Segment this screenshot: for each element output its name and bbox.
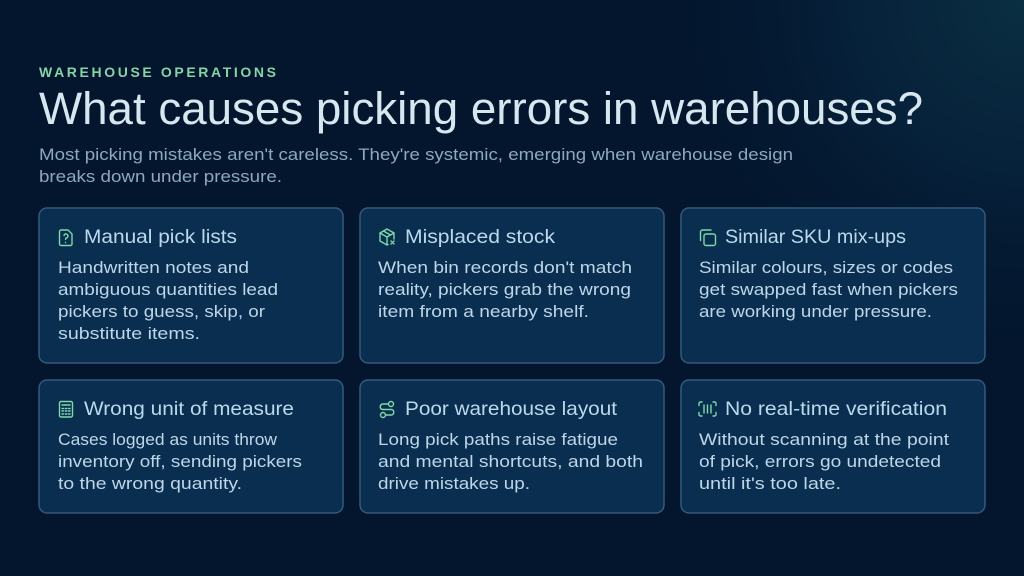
heading: Poor warehouse layout [405, 398, 618, 420]
body text: Similar colours, sizes or codes [699, 259, 953, 277]
body text: item from a nearby shelf. [378, 303, 589, 321]
subtitle [39, 146, 793, 186]
body text: until it's too late. [699, 475, 841, 493]
body text: When bin records don't match [378, 259, 632, 277]
heading: Similar SKU mix-ups [725, 226, 906, 248]
body text: Long pick paths raise fatigue [378, 431, 618, 449]
heading: Misplaced stock [405, 226, 555, 248]
body text: pickers to guess, skip, or [58, 303, 266, 321]
panel: misplaced stock [360, 208, 664, 363]
body text: reality, pickers grab the wrong [378, 281, 631, 299]
subtitle: breaks down under pressure. [39, 168, 282, 186]
icon: copy [700, 230, 716, 246]
body text [378, 259, 632, 321]
body text: are working under pressure. [699, 303, 932, 321]
icon: barcode scan [699, 402, 716, 416]
heading: Manual pick lists [84, 226, 237, 248]
body text [699, 431, 949, 493]
subtitle: Most picking mistakes aren't careless. They're systemic, emerging when warehouse design [39, 146, 793, 164]
heading: Wrong unit of measure [84, 398, 294, 420]
heading: No real-time verification [725, 398, 947, 420]
icon: route [380, 402, 394, 418]
body text [378, 431, 643, 493]
eyebrow label: WAREHOUSE OPERATIONS [39, 64, 276, 80]
title: What causes picking errors in warehouses? [39, 83, 923, 134]
body text [58, 431, 302, 493]
body text: Cases logged as units throw [58, 431, 277, 449]
body text: substitute items. [58, 325, 200, 343]
body text: Without scanning at the point [699, 431, 949, 449]
panel: manual pick lists [39, 208, 343, 363]
body text [699, 259, 958, 321]
panel: similar SKU mix-ups [681, 208, 985, 363]
body text: Handwritten notes and [58, 259, 249, 277]
icon: box with x [380, 229, 394, 245]
body text: of pick, errors go undetected [699, 453, 941, 471]
panel: no real-time verification [681, 380, 985, 513]
icon: calculator [60, 402, 72, 417]
panel: poor warehouse layout [360, 380, 664, 513]
body text: get swapped fast when pickers [699, 281, 958, 299]
icon: document with question mark [60, 230, 72, 246]
body text: to the wrong quantity. [58, 475, 242, 493]
body text: ambiguous quantities lead [58, 281, 278, 299]
body text: inventory off, sending pickers [58, 453, 302, 471]
panel: wrong unit of measure [39, 380, 343, 513]
body text: and mental shortcuts, and both [378, 453, 643, 471]
body text [58, 259, 278, 343]
body text: drive mistakes up. [378, 475, 530, 493]
